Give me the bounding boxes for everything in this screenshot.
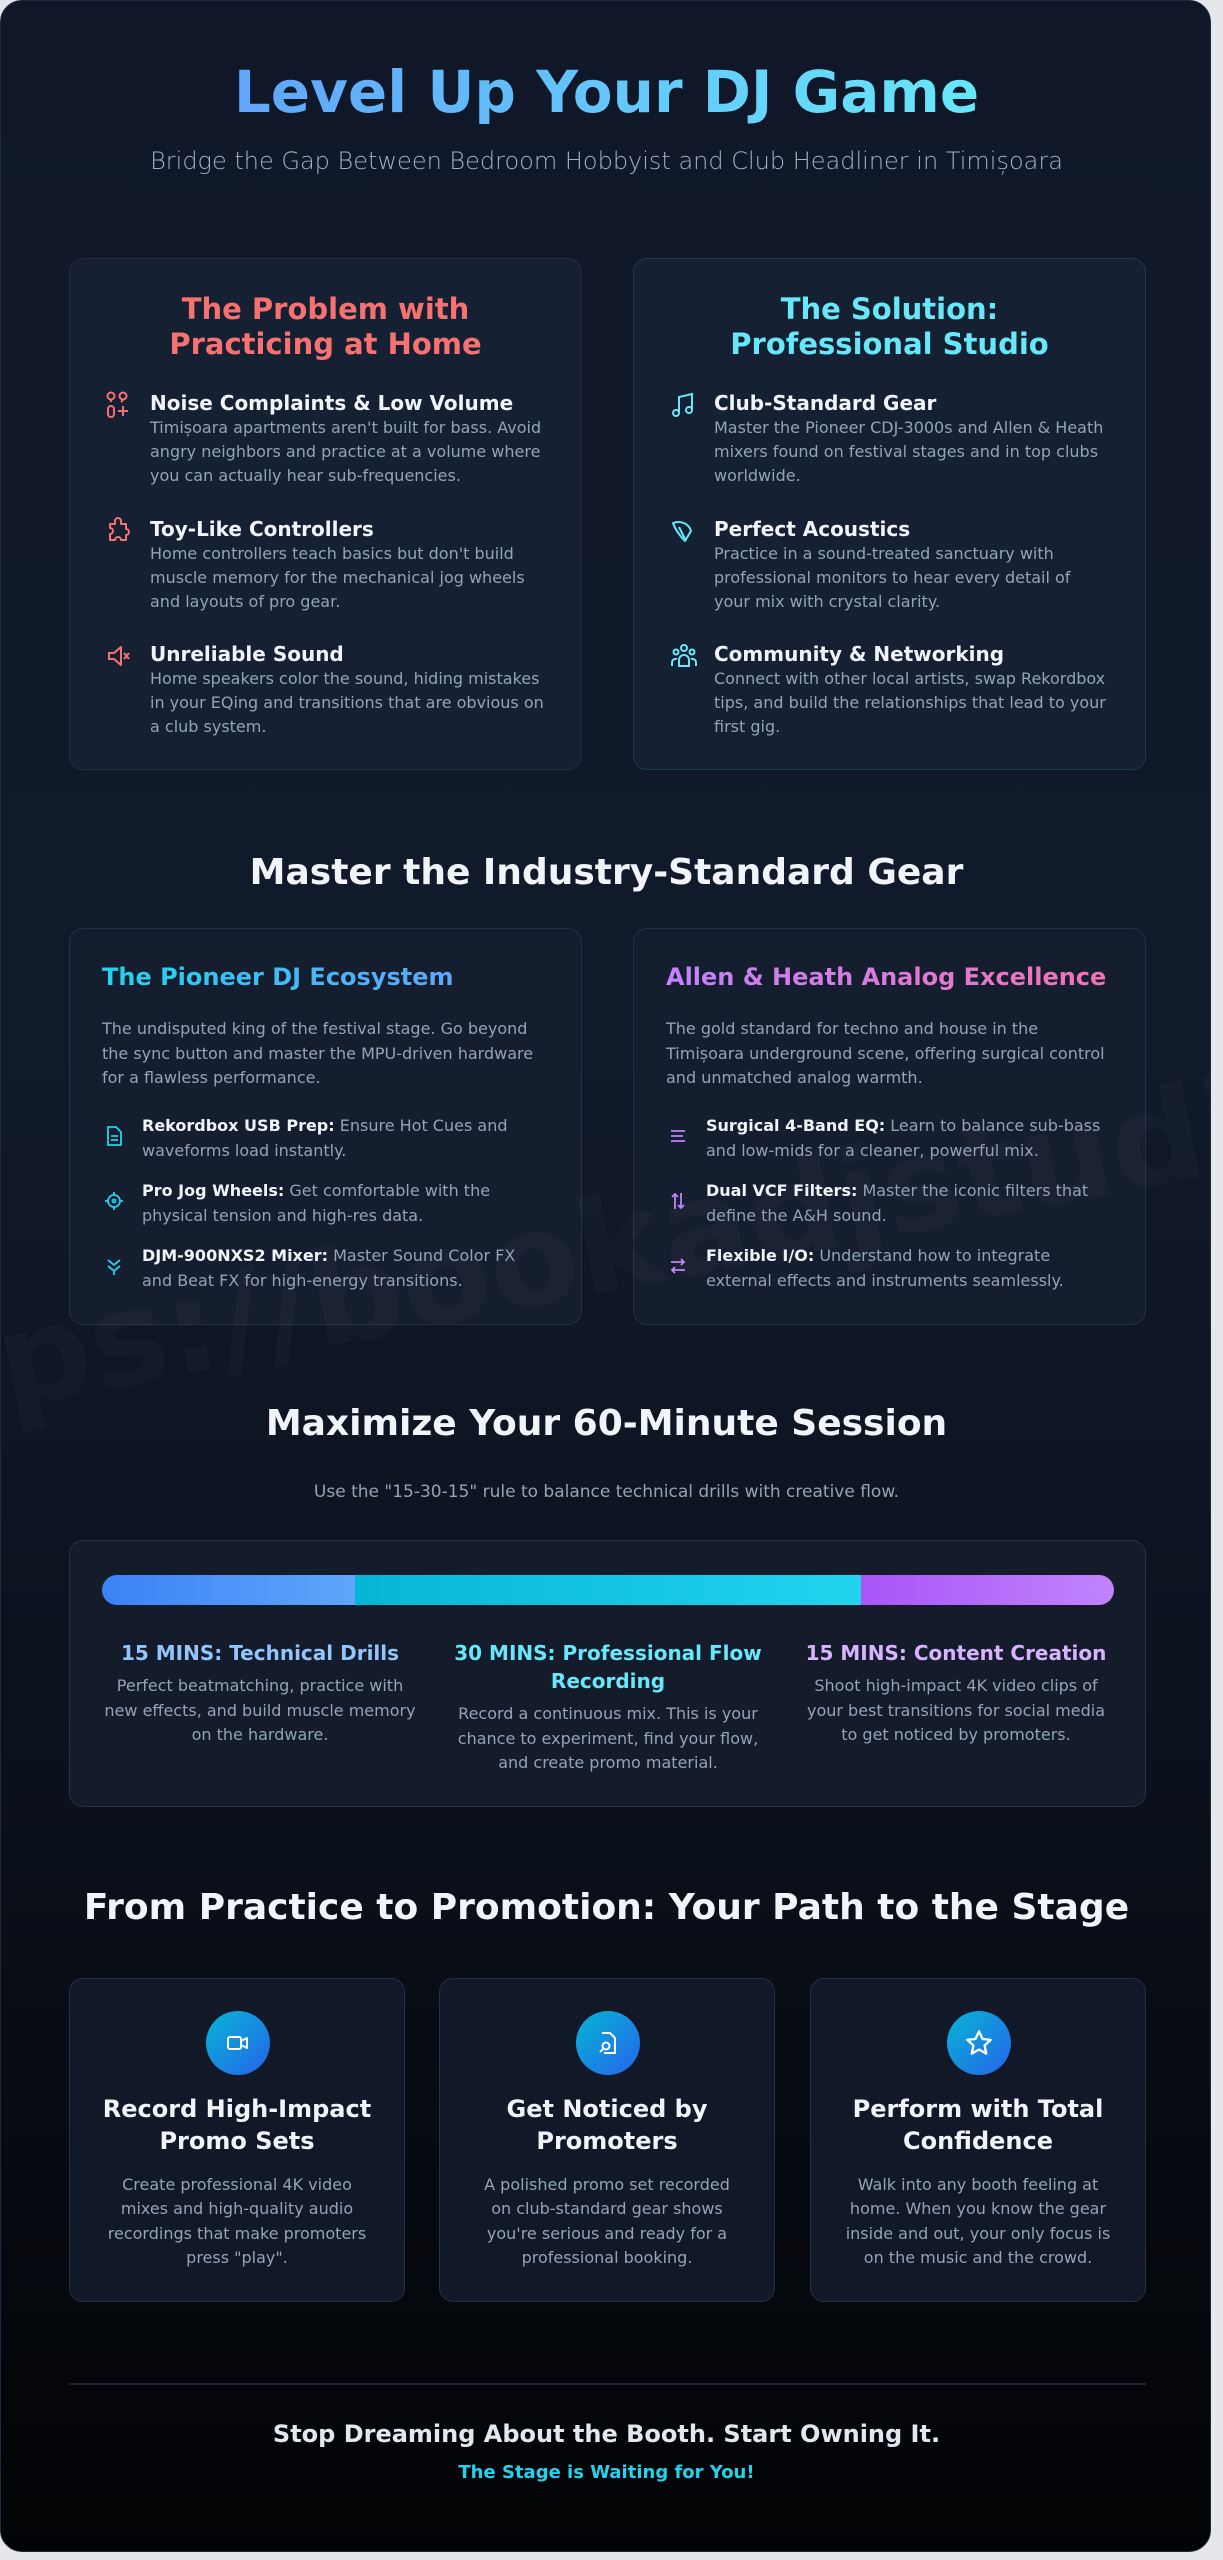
card: record: [69, 1978, 405, 2302]
column: content creation: Shoot high-impact 4K video clips of your best transitions for social media to get noticed by promoters.: [807, 1676, 1105, 1744]
icon: people: [671, 644, 697, 667]
icon: puzzle: [109, 517, 130, 541]
item: unreliable sound: [108, 642, 544, 736]
heading: session: Maximize Your 60-Minute Session: [266, 1403, 947, 1444]
card: noticed: A polished promo set recorded on club-standard gear shows you're serious and ready for a professional booking.: [484, 2175, 730, 2267]
icon: noise: [106, 392, 128, 418]
icon: music: [672, 392, 693, 417]
panel: allen heath: [633, 928, 1146, 1325]
icon: arrows updown: [671, 1192, 685, 1210]
item: toy controllers: [109, 517, 525, 611]
allen heading: Allen & Heath Analog Excellence: [666, 963, 1106, 991]
session subtitle: Use the "15-30-15" rule to balance technical drills with creative flow.: [314, 1482, 899, 1502]
icon: swap: [670, 1258, 686, 1274]
allen desc: The gold standard for techno and house in the Timișoara underground scene, offering surgical control and unmatched analog warmth.: [666, 1019, 1105, 1087]
item: jog: Pro Jog Wheels: Get comfortable with the physical tension and high-res data.: [142, 1181, 490, 1224]
item: acoustics: [672, 517, 1071, 611]
card: noticed: [439, 1978, 775, 2302]
icon: star: [947, 2011, 1011, 2075]
panel: problem: Unreliable Sound: [150, 642, 344, 666]
panel: pioneer: [69, 928, 582, 1325]
heading: gear: Master the Industry-Standard Gear: [250, 852, 963, 893]
icon: file search: [576, 2011, 640, 2075]
panel: problem: Timișoara apartments aren't built for bass. Avoid angry neighbors and practice at a volume where you can actually hear sub-frequencies.: [150, 418, 541, 485]
icon: file: [107, 1126, 122, 1146]
item: filters: Dual VCF Filters: Master the iconic filters that define the A&H sound.: [706, 1181, 1088, 1224]
footer tagline: The Stage is Waiting for You!: [458, 2462, 755, 2483]
item: mixer: DJM-900NXS2 Mixer: Master Sound Color FX and Beat FX for high-energy transitions.: [142, 1246, 515, 1290]
icon: acoustics: [672, 521, 692, 542]
column: flow recording: 30 MINS: Professional Flow Recording: [454, 1641, 762, 1693]
panel: timeline: [69, 1540, 1146, 1807]
panel: problem: [69, 258, 582, 770]
icon: speaker off: [108, 646, 130, 666]
solution heading: The Solution:: [781, 292, 998, 326]
card: record: Record High-Impact Promo Sets: [103, 2095, 371, 2155]
panel: problem: Home speakers color the sound, hiding mistakes in your EQing and transitions that are obvious on a club system.: [150, 669, 544, 736]
item: eq: Surgical 4-Band EQ: Learn to balance sub-bass and low-mids for a cleaner, powerful mix.: [706, 1116, 1100, 1160]
item: gear: [672, 391, 1103, 485]
item: rekordbox: Rekordbox USB Prep: Ensure Hot Cues and waveforms load instantly.: [142, 1116, 507, 1160]
column: content creation: 15 MINS: Content Creation: [806, 1641, 1106, 1665]
panel: problem: Home controllers teach basics but don't build muscle memory for the mechanical jog wheels and layouts of pro gear.: [150, 544, 525, 611]
problem heading: [169, 292, 482, 361]
problem heading: The Problem with: [182, 292, 469, 326]
title: Level Up Your DJ Game: [234, 58, 979, 126]
icon: chevrons: [108, 1259, 120, 1275]
card: record: Create professional 4K video mixes and high-quality audio recordings that make promoters press "play".: [108, 2175, 366, 2267]
timeline bar: [102, 1575, 1114, 1605]
item: community: [671, 642, 1106, 736]
panel: problem: Toy-Like Controllers: [150, 517, 374, 541]
column: flow recording: Record a continuous mix. This is your chance to experiment, find your flow, and create promo material.: [458, 1704, 758, 1772]
item: io: Flexible I/O: Understand how to integrate external effects and instruments seamlessly.: [706, 1246, 1064, 1290]
icon: video: [206, 2011, 270, 2075]
panel: solution: Master the Pioneer CDJ-3000s and Allen & Heath mixers found on festival stages and in top clubs worldwide.: [714, 418, 1103, 485]
panel: solution: Perfect Acoustics: [714, 517, 910, 541]
solution heading: Professional Studio: [730, 327, 1049, 361]
icon: target: [105, 1192, 123, 1210]
column: technical drills: 15 MINS: Technical Drills: [121, 1641, 399, 1665]
subtitle: Bridge the Gap Between Bedroom Hobbyist and Club Headliner in Timișoara: [150, 147, 1063, 175]
panel: solution: Practice in a sound-treated sanctuary with professional monitors to hear every detail of your mix with crystal clarity.: [714, 544, 1070, 611]
item: noise: [106, 391, 541, 485]
column: technical drills: [104, 1641, 416, 1744]
column: flow recording: [454, 1641, 762, 1772]
heading: path: From Practice to Promotion: Your Path to the Stage: [84, 1887, 1129, 1928]
panel: solution: Club-Standard Gear: [714, 391, 936, 415]
card: confidence: [810, 1978, 1146, 2302]
solution heading: [730, 292, 1049, 361]
panel: solution: Connect with other local artists, swap Rekordbox tips, and build the relationships that lead to your first gig.: [714, 669, 1106, 736]
panel: solution: [633, 258, 1146, 770]
problem heading: Practicing at Home: [169, 327, 482, 361]
column: content creation: [806, 1641, 1106, 1744]
footer headline: Stop Dreaming About the Booth. Start Owning It.: [273, 2420, 940, 2448]
icon: lines: [671, 1130, 685, 1142]
card: confidence: Walk into any booth feeling at home. When you know the gear inside and out, your only focus is on the music and the crowd.: [846, 2175, 1110, 2267]
card: confidence: Perform with Total Confidence: [853, 2095, 1103, 2155]
column: technical drills: Perfect beatmatching, practice with new effects, and build muscle memory on the hardware.: [104, 1676, 416, 1744]
panel: problem: Noise Complaints & Low Volume: [150, 391, 513, 415]
pioneer desc: The undisputed king of the festival stage. Go beyond the sync button and master the MPU-driven hardware for a flawless performance.: [102, 1019, 533, 1087]
card: noticed: Get Noticed by Promoters: [507, 2095, 707, 2155]
panel: solution: Community & Networking: [714, 642, 1004, 666]
pioneer heading: The Pioneer DJ Ecosystem: [102, 963, 454, 991]
